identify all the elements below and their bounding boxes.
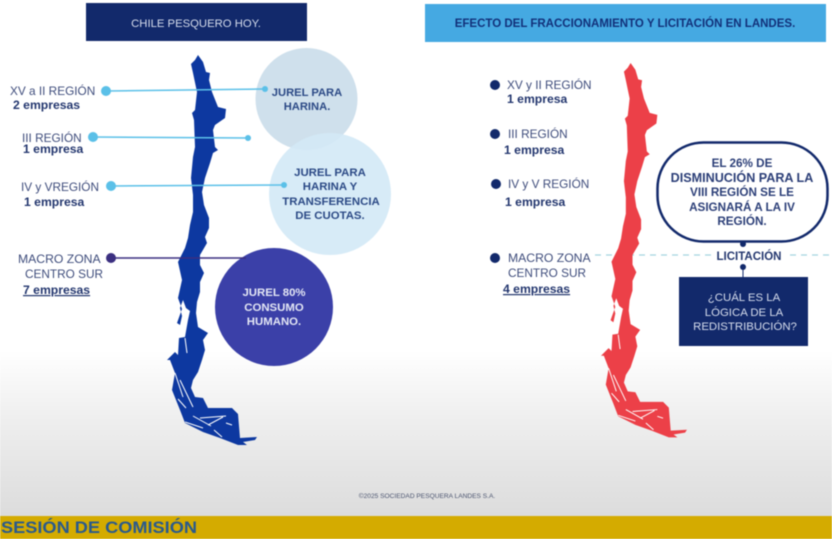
dashed line: licitacion — [595, 254, 832, 256]
left region labels — [10, 84, 103, 297]
circle: jurel para harina — [256, 48, 358, 150]
right region labels: 1 empresa — [504, 143, 565, 157]
left region labels: 2 empresas — [13, 98, 80, 112]
right region labels: IV y V REGIÓN — [508, 177, 589, 191]
left region labels: 1 empresa — [24, 195, 85, 209]
right heading: efecto del fraccionamiento: EFECTO DEL FRACCIONAMIENTO Y LICITACIÓN EN LANDES. — [455, 17, 795, 30]
circle: jurel para harina: HARINA. — [284, 101, 330, 113]
left region labels: XV a II REGIÓN — [10, 84, 95, 98]
circle: jurel para harina y transferencia de cuotas — [269, 133, 391, 255]
circle: jurel para harina y transferencia de cuotas: TRANSFERENCIA — [282, 196, 380, 208]
right region labels: CENTRO SUR — [508, 266, 586, 280]
left region labels: III REGIÓN — [22, 131, 82, 145]
left region labels: MACRO ZONA — [18, 252, 101, 266]
circle: jurel para harina y transferencia de cuotas: HARINA Y — [303, 181, 358, 193]
footer bar: sesion de comision — [0, 516, 832, 539]
right heading: efecto del fraccionamiento — [425, 4, 826, 42]
right region labels: 1 empresa — [505, 195, 566, 209]
left region labels: CENTRO SUR — [25, 267, 103, 281]
licitacion label: LICITACIÓN — [717, 250, 781, 263]
callout: 26% decrease: REGIÓN. — [717, 215, 767, 228]
right region labels: MACRO ZONA — [508, 251, 591, 265]
callout: 26% decrease — [658, 142, 828, 242]
callout: 26% decrease: DISMINUCIÓN PARA LA — [671, 170, 813, 185]
connector: callout to licitacion to question box — [740, 241, 746, 277]
callout: 26% decrease: VIII REGIÓN SE LE — [690, 186, 794, 199]
left region labels: 7 empresas — [23, 283, 90, 297]
circle: jurel 80% consumo humano: HUMANO. — [247, 316, 301, 328]
copyright: ©2025 SOCIEDAD PESQUERA LANDES S.A. — [359, 492, 495, 500]
leader lines and dots: left regions — [88, 86, 287, 263]
left heading: Chile pesquero hoy: CHILE PESQUERO HOY. — [131, 18, 261, 30]
question box: REDISTRIBUCIÓN? — [693, 320, 797, 333]
circle: jurel para harina: JUREL PARA — [272, 87, 342, 99]
question box — [679, 277, 808, 346]
circle: jurel 80% consumo humano: JUREL 80% — [242, 287, 306, 299]
map: Chile in blue — [167, 55, 257, 445]
circle: jurel para harina y transferencia de cuotas: JUREL PARA — [294, 167, 366, 179]
map: Chile in red — [601, 63, 687, 437]
callout: 26% decrease: EL 26% DE — [712, 157, 773, 170]
footer bar: sesion de comision: SESIÓN DE COMISIÓN — [1, 518, 197, 537]
circle: jurel 80% consumo humano — [215, 248, 333, 366]
right region labels: III REGIÓN — [508, 127, 568, 141]
callout: 26% decrease: ASIGNARÁ A LA IV — [689, 201, 795, 214]
right region labels — [503, 78, 592, 296]
circle: jurel 80% consumo humano: CONSUMO — [244, 302, 304, 314]
right region labels: XV y II REGIÓN — [507, 78, 592, 92]
right region labels: 1 empresa — [507, 92, 568, 106]
question box: LÓGICA DE LA — [705, 306, 784, 319]
left heading: Chile pesquero hoy — [86, 3, 307, 41]
right region bullets — [490, 80, 501, 263]
circle: jurel para harina y transferencia de cuotas: DE CUOTAS. — [295, 210, 365, 222]
right region labels: 4 empresas — [503, 282, 570, 296]
left region labels: IV y VREGIÓN — [21, 180, 99, 194]
question box: ¿CUÁL ES LA — [708, 291, 781, 304]
left region labels: 1 empresa — [23, 142, 84, 156]
